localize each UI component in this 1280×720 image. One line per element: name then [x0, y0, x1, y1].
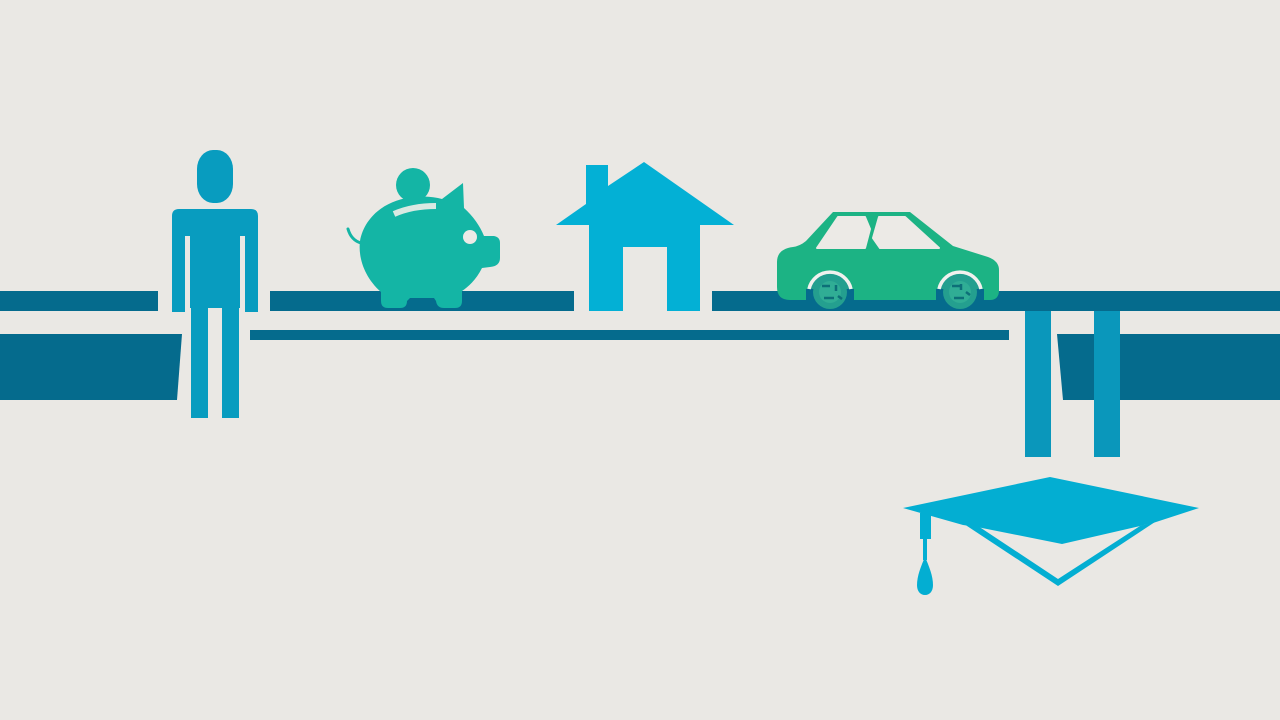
vertical pillars [1025, 311, 1120, 457]
rear wheel [806, 272, 854, 309]
front wheel [936, 272, 984, 309]
icon: car [777, 212, 999, 309]
icon: piggy bank [348, 168, 500, 308]
icon: graduation cap [903, 477, 1199, 595]
thin middle bar [250, 330, 1009, 340]
icon: house [556, 162, 734, 311]
upper road bar segments [0, 291, 1280, 311]
left block [0, 334, 182, 400]
right block [1057, 334, 1280, 400]
icon: person [172, 150, 258, 418]
